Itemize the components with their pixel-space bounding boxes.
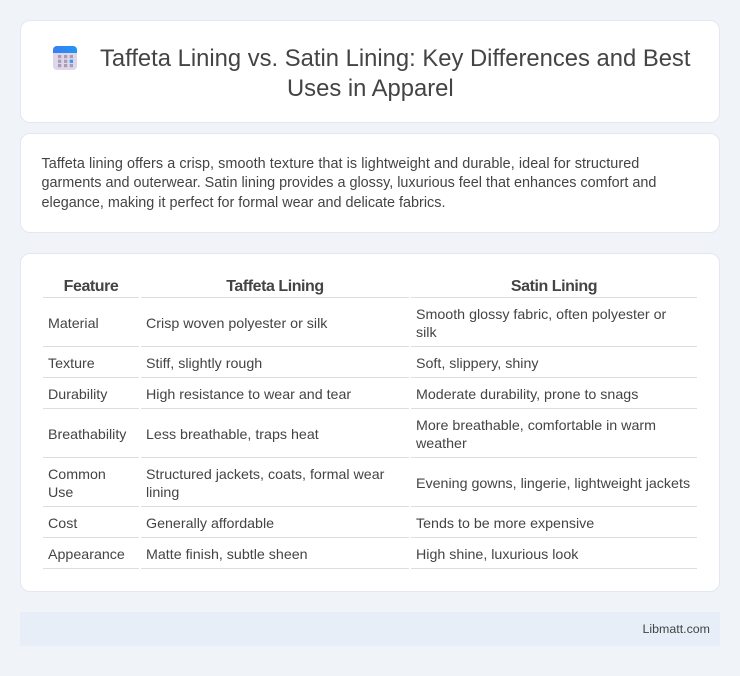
table header: Feature <box>64 278 118 295</box>
row: material: Smooth glossy fabric, often polyester or <box>416 307 666 323</box>
row: common use: Common <box>48 467 106 483</box>
row: cost: Generally affordable <box>146 516 274 532</box>
row: texture <box>48 356 538 372</box>
text block: introduction: Taffeta lining offers a crisp, smooth texture that is lightweight and durable, ideal for structured <box>42 156 639 172</box>
row: cost: Tends to be more expensive <box>416 516 594 532</box>
row: material <box>48 307 666 341</box>
row: durability: High resistance to wear and tear <box>146 387 351 403</box>
row: cost: Cost <box>48 516 77 532</box>
row: breathability: Less breathable, traps heat <box>146 427 319 443</box>
row: breathability: More breathable, comfortable in warm <box>416 418 656 434</box>
footer <box>20 612 720 646</box>
row: common use: Use <box>48 485 73 501</box>
row: material: silk <box>416 325 437 341</box>
panel: comparison table <box>20 253 720 592</box>
icon: calendar <box>53 46 77 70</box>
row: breathability: Breathability <box>48 427 126 443</box>
text block: introduction <box>42 156 656 210</box>
row: texture: Texture <box>48 356 95 372</box>
row: appearance: Appearance <box>48 547 125 563</box>
row: texture: Soft, slippery, shiny <box>416 356 538 372</box>
row: common use: Structured jackets, coats, formal wear <box>146 467 384 483</box>
row: material: Crisp woven polyester or silk <box>146 316 327 332</box>
row: durability: Durability <box>48 387 107 403</box>
row: common use: Evening gowns, lingerie, lightweight jackets <box>416 476 690 492</box>
heading <box>100 45 690 102</box>
table header: Taffeta Lining <box>226 278 324 295</box>
row: material: Material <box>48 316 99 332</box>
panel: title card <box>20 20 720 123</box>
table header <box>64 278 597 295</box>
row: appearance: Matte finish, subtle sheen <box>146 547 308 563</box>
panel: introduction <box>20 133 720 233</box>
row: common use: lining <box>146 485 179 501</box>
row: texture: Stiff, slightly rough <box>146 356 262 372</box>
row: breathability: weather <box>416 436 467 452</box>
heading: Taffeta Lining vs. Satin Lining: Key Differences and Best <box>100 45 690 72</box>
row: durability: Moderate durability, prone to snags <box>416 387 638 403</box>
row: appearance <box>48 547 578 563</box>
text block: introduction: garments and outerwear. Satin lining provides a glossy, luxurious feel that enhances comfort and <box>42 175 656 191</box>
row: common use <box>48 467 690 501</box>
row: appearance: High shine, luxurious look <box>416 547 578 563</box>
row: durability <box>48 387 638 403</box>
table header: Satin Lining <box>511 278 597 295</box>
footer text: Libmatt.com <box>643 622 710 636</box>
heading: Uses in Apparel <box>287 75 454 102</box>
row: breathability <box>48 418 656 452</box>
row: cost <box>48 516 594 532</box>
text block: introduction: elegance, making it perfect for formal wear and delicate fabrics. <box>42 194 445 210</box>
